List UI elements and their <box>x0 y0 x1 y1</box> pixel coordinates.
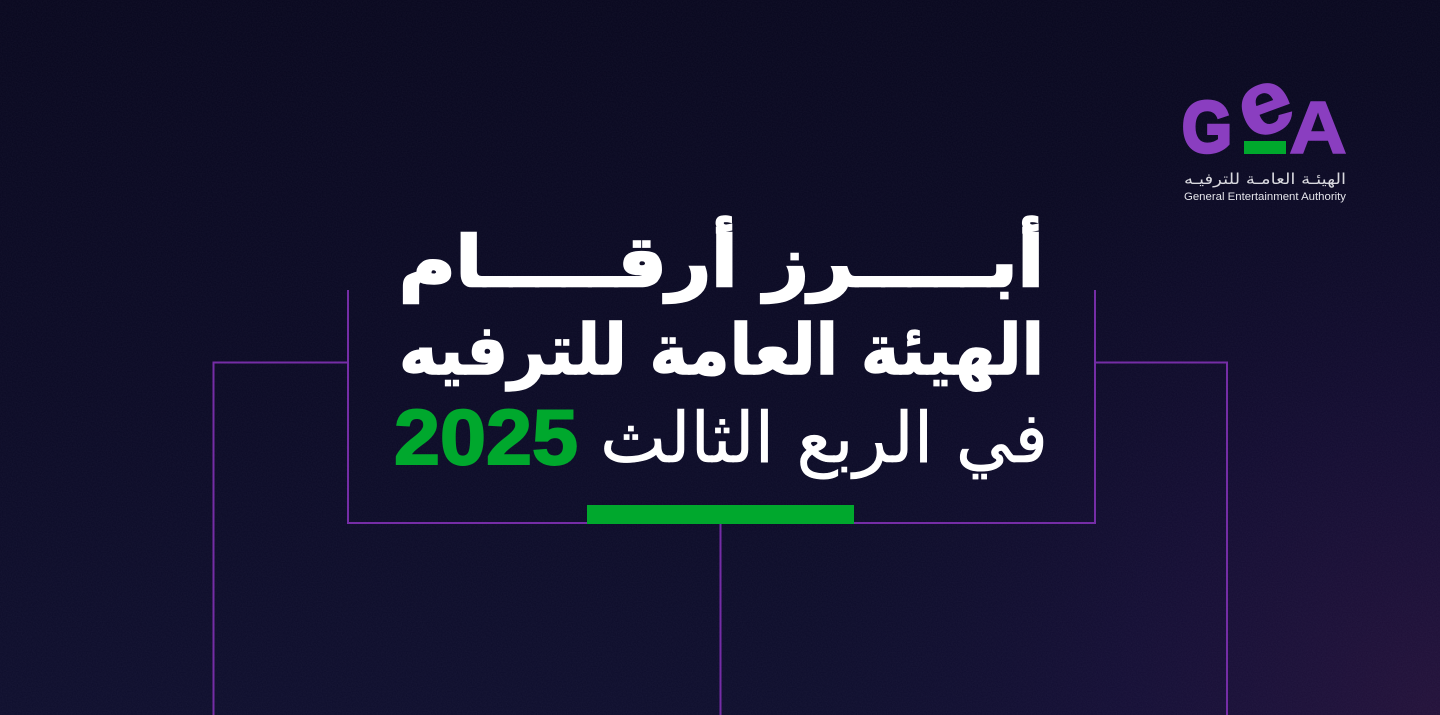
logo Arabic name: الهيئـة العامـة للترفيـه <box>1184 170 1346 188</box>
logo letter G: G <box>1182 88 1232 168</box>
year 2025: 2025 <box>394 393 578 481</box>
logo: General Entertainment Authority <box>1182 47 1347 203</box>
title line 2: الهيئة العامة للترفيه <box>399 309 1044 391</box>
title line 3: في الربع الثالث <box>600 397 1048 480</box>
title line 1: أبـــــرز أرقـــــام <box>399 216 1044 304</box>
title <box>394 216 1048 481</box>
green accent bar <box>587 505 854 524</box>
logo letter A: A <box>1289 86 1347 169</box>
logo English name: General Entertainment Authority <box>1184 191 1347 203</box>
logo green bar <box>1244 141 1286 154</box>
frame connector lines <box>214 290 1227 715</box>
logo letter e: e <box>1222 47 1306 159</box>
